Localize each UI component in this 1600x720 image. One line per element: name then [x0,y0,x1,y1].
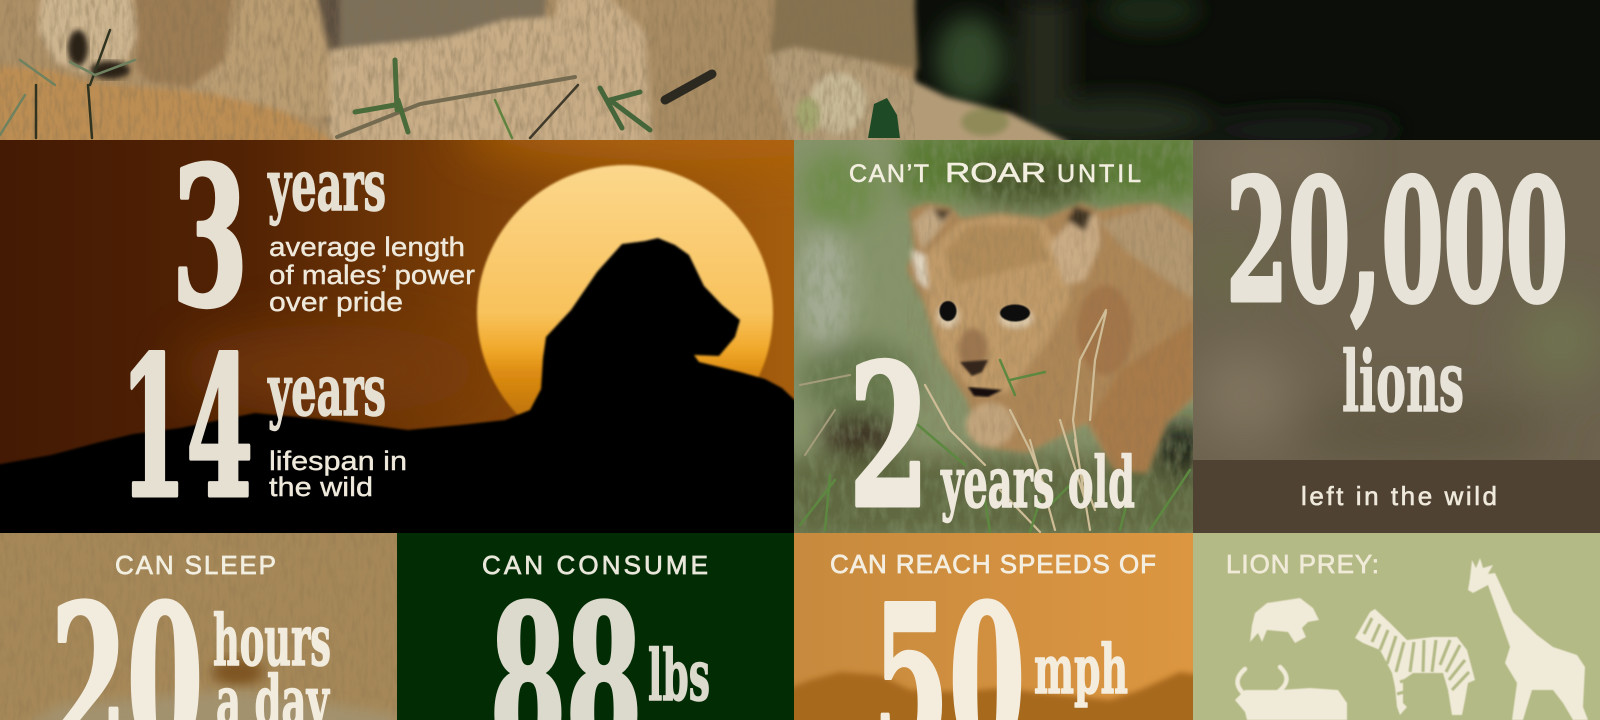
text: average length of males' power over pride: average length [269,232,465,262]
text: average length of males' power over pride: over pride [269,287,403,317]
text: average length of males' power over pride [269,232,475,317]
label: hours a day [214,610,330,720]
panel: sunset lion silhouette [0,140,794,498]
shoulder / leg [1090,320,1194,473]
paw [38,0,137,76]
icon: buffalo [1235,667,1347,720]
text: lifespan in the wild: the wild [269,472,373,502]
texture: grass [794,140,1193,533]
label: hours a day: hours [213,599,331,682]
label: years: years [267,144,386,227]
ear [1050,215,1100,285]
heading: can't roar until: CAN’T [849,160,929,188]
panel: can sleep 20 hours a day [0,533,397,720]
icon: cub [907,203,1197,473]
fur texture [0,0,915,140]
body light [1100,205,1194,300]
orange cub [0,66,335,140]
icon: giraffe [1468,558,1588,720]
band: left in the wild [1193,460,1600,533]
lion silhouette and ground [0,238,800,540]
text: left in the wild: left in the wild [1301,481,1497,511]
heading: can't roar until: ROAR [945,157,1046,188]
heading: can sleep: CAN SLEEP [115,550,276,580]
icon: warthog [1250,598,1319,643]
label: lbs: lbs [648,634,710,717]
light lobe [765,47,1073,150]
heading: lion prey: LION PREY: [1226,549,1379,579]
grass blades [800,310,1190,532]
panel: lions left in the wild [1190,130,1600,533]
panel: can reach speeds of 50 mph [785,533,1200,720]
heading: can't roar until: UNTIL [1057,160,1141,188]
heading: can consume: CAN CONSUME [482,550,708,580]
shadow beside leg [316,0,340,130]
panel: lion cub photo [794,140,1193,533]
fur texture [907,203,1197,473]
text: lifespan in the wild: lifespan in [269,446,407,476]
label: years old: years old [940,441,1135,524]
head top speckled [945,225,1050,285]
icon: zebra [1355,609,1475,715]
label: mph: mph [1034,630,1128,709]
head [925,215,1075,395]
label: lions: lions [1342,333,1464,431]
panel: lion prey [1193,533,1600,720]
text: lifespan in the wild [269,450,406,496]
panel: lion cubs photo banner [0,0,1600,150]
icon: setting sun [476,164,774,416]
text: average length of males' power over pride: of males’ power [269,260,475,290]
right body [647,54,662,140]
heading: can't roar until [850,162,1140,182]
label: years: years [267,349,386,432]
grass and twigs [0,30,712,138]
pale cub body [330,0,660,150]
leg [190,0,332,118]
heading: can reach speeds of: CAN REACH SPEEDS OF [830,549,1156,579]
number: 3: 3 [172,126,248,349]
number: 2: 2 [849,322,929,551]
fur: dark grey back [330,0,547,50]
panel: can consume 88 lbs [397,533,794,720]
panel: sunset lion silhouette: 14 [120,316,253,541]
